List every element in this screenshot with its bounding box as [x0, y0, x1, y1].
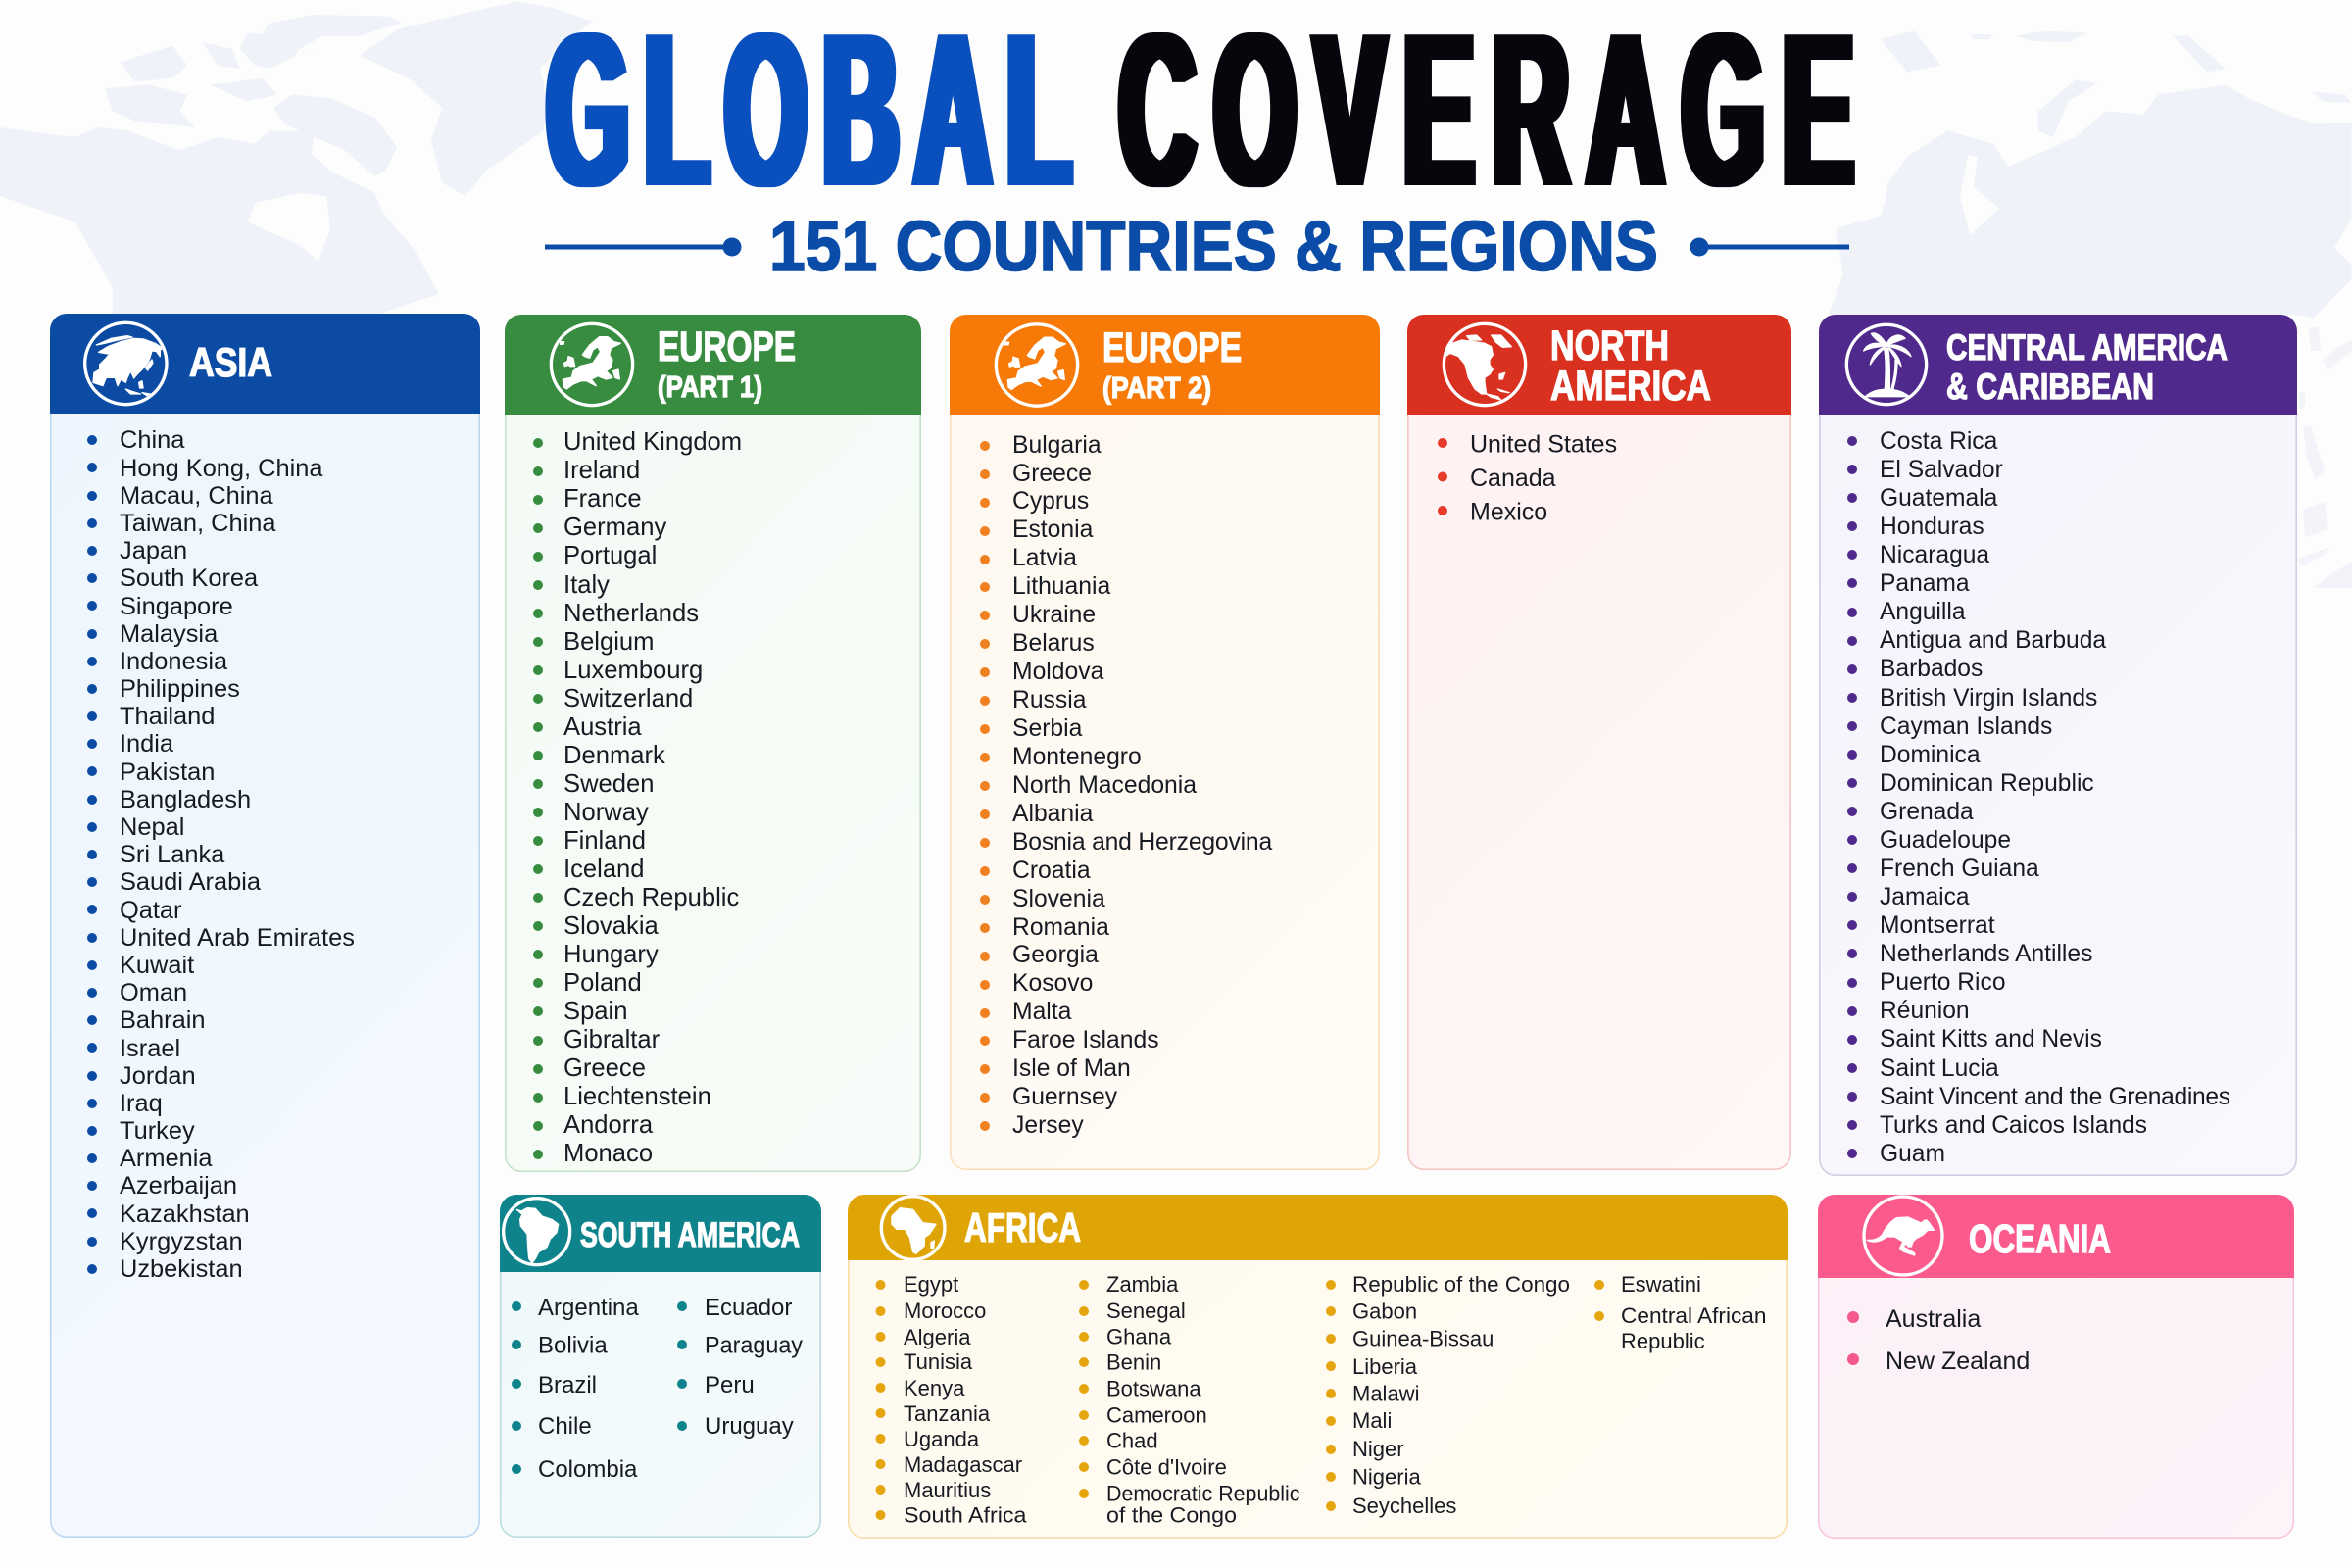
panel: oceania — [1818, 1195, 2294, 1539]
list: asia countries: Turkey — [120, 1117, 195, 1145]
list: asia countries: Pakistan — [120, 759, 215, 786]
heading: central america and caribbean — [1946, 327, 2228, 407]
list: central america and caribbean countries: Saint Vincent and the Grenadines — [1880, 1084, 2230, 1110]
list: europe part 1 countries: Belgium — [564, 628, 654, 656]
list: europe part 2 countries: Russia — [1012, 687, 1086, 713]
list: south america countries: Colombia — [538, 1456, 638, 1483]
header: oceania — [1818, 1195, 2294, 1278]
heading: europe: EUROPE — [1102, 324, 1242, 371]
list: south america countries — [512, 1295, 803, 1483]
list: asia countries: Azerbaijan — [120, 1172, 237, 1200]
list: europe part 1 countries: Finland — [564, 827, 646, 855]
list: asia countries: Israel — [120, 1035, 180, 1062]
list: africa countries: Guinea-Bissau — [1352, 1327, 1494, 1350]
list: africa countries: Central African — [1621, 1303, 1766, 1328]
icon: palm tree — [1846, 324, 1927, 405]
list: europe part 1 countries: Norway — [564, 799, 649, 826]
panel: central america and caribbean — [1819, 315, 2297, 1176]
list: central america and caribbean countries: Réunion — [1880, 998, 1970, 1024]
list: asia countries: South Korea — [120, 564, 258, 592]
list: africa countries: Algeria — [904, 1325, 971, 1349]
list: africa countries: Chad — [1106, 1429, 1158, 1452]
list: asia countries: Philippines — [120, 675, 240, 703]
list: asia countries: Jordan — [120, 1062, 196, 1090]
list: africa countries: Democratic Republic — [1106, 1482, 1299, 1505]
list: central america and caribbean countries: Netherlands Antilles — [1880, 941, 2092, 967]
list: north america countries: Canada — [1470, 465, 1556, 492]
list: central america and caribbean countries: Guam — [1880, 1141, 1945, 1167]
header: asia — [50, 314, 480, 414]
list: europe part 2 countries: Serbia — [1012, 715, 1082, 742]
list: central america and caribbean countries: British Virgin Islands — [1880, 684, 2097, 711]
list: africa countries: Republic of the Congo — [1352, 1272, 1570, 1297]
list: asia countries: Thailand — [120, 703, 215, 730]
list: europe part 2 countries: Belarus — [1012, 630, 1095, 657]
list: europe part 2 countries: Bulgaria — [1012, 432, 1102, 459]
list: asia countries: Taiwan, China — [120, 510, 275, 537]
list: south america countries: Ecuador — [705, 1295, 792, 1321]
list: south america countries: Paraguay — [705, 1333, 803, 1358]
list: europe part 1 countries: France — [564, 485, 642, 513]
list: north america countries — [1438, 431, 1617, 525]
list: africa countries: Uganda — [904, 1427, 980, 1451]
list: oceania countries: New Zealand — [1886, 1348, 2030, 1375]
list: europe part 2 countries: Latvia — [1012, 545, 1077, 571]
list: africa countries: Eswatini — [1621, 1272, 1701, 1297]
list: central america and caribbean countries — [1847, 428, 2230, 1167]
list: central america and caribbean countries: Panama — [1880, 570, 1970, 597]
heading: asia: ASIA — [189, 339, 272, 385]
list: asia countries: Kyrgyzstan — [120, 1228, 243, 1255]
list: europe part 1 countries: Ireland — [564, 457, 640, 484]
list: africa countries: Zambia — [1106, 1272, 1179, 1297]
list: europe part 2 countries: Bosnia and Herzegovina — [1012, 829, 1272, 856]
list: central america and caribbean countries: Guadeloupe — [1880, 827, 2011, 854]
list: central america and caribbean countries: Guatemala — [1880, 485, 1997, 512]
list: europe part 2 countries: Georgia — [1012, 942, 1099, 968]
heading: europe: EUROPE — [658, 323, 796, 370]
list: europe part 1 countries: Netherlands — [564, 600, 699, 627]
list: asia countries: Singapore — [120, 593, 233, 620]
list: asia countries: Oman — [120, 979, 187, 1006]
heading: oceania: OCEANIA — [1969, 1216, 2111, 1261]
list: africa countries: Seychelles — [1352, 1494, 1456, 1518]
list: south america countries: Brazil — [538, 1372, 597, 1398]
list: europe part 1 countries: Sweden — [564, 770, 655, 798]
panel: south america — [500, 1195, 821, 1538]
list: europe part 2 countries: Malta — [1012, 999, 1071, 1025]
list: europe part 1 countries: Gibraltar — [564, 1026, 660, 1054]
list: south america countries: Chile — [538, 1413, 592, 1440]
list: africa countries: Gabon — [1352, 1299, 1417, 1323]
list: asia countries — [87, 426, 355, 1283]
list: oceania countries: Australia — [1886, 1305, 1981, 1333]
list: south america countries: Bolivia — [538, 1333, 608, 1358]
icon: globe africa — [881, 1197, 945, 1259]
list: south america countries: Uruguay — [705, 1413, 794, 1440]
list: asia countries: Bahrain — [120, 1006, 206, 1034]
list: africa countries: South Africa — [904, 1503, 1027, 1527]
list: asia countries: Indonesia — [120, 648, 227, 675]
list: europe part 2 countries: Estonia — [1012, 516, 1093, 543]
list: north america countries: Mexico — [1470, 498, 1547, 525]
list: europe part 1 countries: Denmark — [564, 742, 665, 769]
list: central america and caribbean countries: Barbados — [1880, 656, 1983, 682]
list: africa countries: Senegal — [1106, 1298, 1186, 1323]
list: europe part 1 countries: Iceland — [564, 856, 645, 883]
icon: globe north america — [1444, 323, 1526, 406]
list: oceania countries — [1847, 1305, 2030, 1375]
list: central america and caribbean countries: Puerto Rico — [1880, 969, 2005, 996]
header: europe part 1 — [505, 315, 921, 415]
list: europe part 2 countries: Croatia — [1012, 858, 1091, 884]
list: africa countries: Egypt — [904, 1272, 958, 1297]
list: africa countries: Morocco — [904, 1298, 986, 1323]
list: europe part 1 countries: United Kingdom — [564, 428, 742, 456]
list: south america countries: Peru — [705, 1372, 755, 1398]
icon: globe europe — [551, 323, 633, 406]
list: europe part 2 countries: Slovenia — [1012, 886, 1105, 912]
list: asia countries: Japan — [120, 537, 187, 564]
list: europe part 1 countries: Austria — [564, 713, 642, 741]
list: asia countries: Qatar — [120, 897, 182, 924]
list: asia countries: China — [120, 426, 184, 454]
list: asia countries: Hong Kong, China — [120, 455, 323, 482]
heading: central america and caribbean: & CARIBBEAN — [1946, 367, 2154, 407]
icon: globe europe — [996, 324, 1078, 406]
list: africa countries: Cameroon — [1106, 1403, 1207, 1427]
list: europe part 2 countries: Romania — [1012, 914, 1109, 941]
list: europe part 2 countries: Albania — [1012, 801, 1093, 827]
subtitle: 151 COUNTRIES & REGIONS — [769, 208, 1658, 286]
list: africa countries — [876, 1272, 1766, 1527]
header: africa — [848, 1195, 1788, 1260]
list: europe part 2 countries: Faroe Islands — [1012, 1027, 1159, 1054]
subtitle left rule — [545, 237, 741, 257]
list: africa countries: Botswana — [1106, 1376, 1201, 1401]
list: europe part 2 countries: Isle of Man — [1012, 1055, 1131, 1082]
list: europe part 1 countries: Slovakia — [564, 912, 659, 940]
list: africa countries: Niger — [1352, 1437, 1404, 1461]
list: africa countries: Malawi — [1352, 1382, 1419, 1405]
header: europe part 2 — [950, 315, 1380, 415]
list: asia countries: United Arab Emirates — [120, 924, 355, 952]
list: central america and caribbean countries: Anguilla — [1880, 599, 1966, 625]
list: europe part 1 countries: Luxembourg — [564, 657, 703, 684]
list: central america and caribbean countries: Honduras — [1880, 514, 1984, 540]
list: europe part 2 countries: Guernsey — [1012, 1084, 1117, 1110]
icon: globe south america — [504, 1199, 570, 1265]
list: europe part 1 countries: Poland — [564, 969, 642, 997]
list: europe part 2 countries: Lithuania — [1012, 573, 1110, 600]
list: africa countries: Madagascar — [904, 1452, 1022, 1477]
panel: north america — [1407, 315, 1791, 1170]
panel: europe part 1 — [505, 315, 921, 1172]
list: africa countries: Mauritius — [904, 1478, 991, 1502]
list: africa countries: Liberia — [1352, 1354, 1418, 1379]
list: asia countries: Malaysia — [120, 620, 218, 648]
list: asia countries: Bangladesh — [120, 786, 251, 813]
list: europe part 1 countries: Andorra — [564, 1111, 653, 1139]
heading: north america: AMERICA — [1550, 363, 1711, 410]
list: africa countries: Benin — [1106, 1350, 1161, 1374]
list: africa countries: Mali — [1352, 1408, 1392, 1433]
list: europe part 1 countries: Spain — [564, 998, 627, 1025]
list: central america and caribbean countries: Grenada — [1880, 799, 1974, 825]
list: asia countries: Saudi Arabia — [120, 868, 261, 896]
heading: north america — [1550, 322, 1711, 410]
list: asia countries: Armenia — [120, 1145, 213, 1172]
list: south america countries: Argentina — [538, 1295, 639, 1321]
list: africa countries: Tanzania — [904, 1401, 991, 1426]
list: europe part 2 countries: North Macedonia — [1012, 772, 1197, 799]
list: europe part 1 countries: Czech Republic — [564, 884, 739, 911]
heading: central america and caribbean: CENTRAL AMERICA — [1946, 327, 2228, 368]
subheading: part 2: (PART 2) — [1102, 370, 1211, 405]
header: central america and caribbean — [1819, 315, 2297, 415]
list: europe part 2 countries: Jersey — [1012, 1112, 1084, 1139]
list: europe part 1 countries: Greece — [564, 1054, 646, 1082]
list: central america and caribbean countries: Montserrat — [1880, 912, 1995, 939]
list: asia countries: Sri Lanka — [120, 841, 224, 868]
list: central america and caribbean countries: El Salvador — [1880, 457, 2003, 483]
list: africa countries: Republic — [1621, 1329, 1705, 1353]
title — [545, 0, 1872, 286]
list: europe part 1 countries: Liechtenstein — [564, 1083, 711, 1110]
list: central america and caribbean countries: Saint Lucia — [1880, 1055, 1999, 1082]
header: north america — [1407, 315, 1791, 415]
list: central america and caribbean countries: Costa Rica — [1880, 428, 1997, 455]
list: central america and caribbean countries: Saint Kitts and Nevis — [1880, 1026, 2102, 1053]
list: central america and caribbean countries: French Guiana — [1880, 856, 2039, 882]
list: asia countries: Uzbekistan — [120, 1255, 243, 1283]
list: europe part 2 countries: Ukraine — [1012, 602, 1096, 628]
panel: europe part 2 — [950, 315, 1380, 1170]
list: asia countries: Kazakhstan — [120, 1200, 250, 1228]
icon: kangaroo — [1864, 1197, 1942, 1275]
panel: africa — [848, 1195, 1788, 1539]
list: asia countries: India — [120, 730, 173, 758]
list: africa countries: of the Congo — [1106, 1503, 1237, 1527]
list: europe part 2 countries: Moldova — [1012, 659, 1103, 685]
list: europe part 2 countries: Kosovo — [1012, 970, 1093, 997]
list: africa countries: Kenya — [904, 1376, 965, 1400]
panel: asia — [50, 314, 480, 1538]
list: europe part 1 countries: Germany — [564, 514, 666, 541]
list: africa countries: Côte d'Ivoire — [1106, 1454, 1227, 1480]
list: europe part 2 countries — [980, 432, 1272, 1139]
list: europe part 2 countries: Greece — [1012, 461, 1092, 487]
list: asia countries: Nepal — [120, 813, 184, 841]
list: north america countries: United States — [1470, 431, 1617, 459]
list: europe part 1 countries — [533, 428, 742, 1167]
list: europe part 1 countries: Hungary — [564, 941, 659, 968]
list: asia countries: Kuwait — [120, 952, 194, 979]
list: central america and caribbean countries: Turks and Caicos Islands — [1880, 1112, 2147, 1139]
list: central america and caribbean countries: Dominica — [1880, 742, 1981, 768]
list: central america and caribbean countries: Antigua and Barbuda — [1880, 627, 2106, 654]
subheading: part 1: (PART 1) — [658, 369, 762, 404]
list: europe part 2 countries: Montenegro — [1012, 744, 1142, 770]
list: africa countries: Nigeria — [1352, 1464, 1421, 1490]
list: europe part 1 countries: Switzerland — [564, 685, 693, 712]
list: africa countries: Ghana — [1106, 1325, 1172, 1348]
list: asia countries: Macau, China — [120, 482, 273, 510]
heading: north america: NORTH — [1550, 322, 1669, 369]
header: south america — [500, 1195, 821, 1272]
list: central america and caribbean countries: Dominican Republic — [1880, 770, 2094, 797]
list: central america and caribbean countries: Cayman Islands — [1880, 713, 2052, 740]
list: central america and caribbean countries: Jamaica — [1880, 884, 1970, 910]
subtitle right rule — [1690, 237, 1849, 257]
list: central america and caribbean countries: Nicaragua — [1880, 542, 1989, 568]
list: europe part 1 countries: Portugal — [564, 542, 657, 569]
heading: africa: AFRICA — [964, 1204, 1081, 1250]
list: europe part 2 countries: Cyprus — [1012, 488, 1089, 514]
list: europe part 1 countries: Italy — [564, 571, 610, 599]
icon: globe asia — [85, 322, 167, 405]
list: europe part 1 countries: Monaco — [564, 1140, 653, 1167]
list: asia countries: Iraq — [120, 1090, 163, 1117]
list: africa countries: Tunisia — [904, 1349, 973, 1374]
